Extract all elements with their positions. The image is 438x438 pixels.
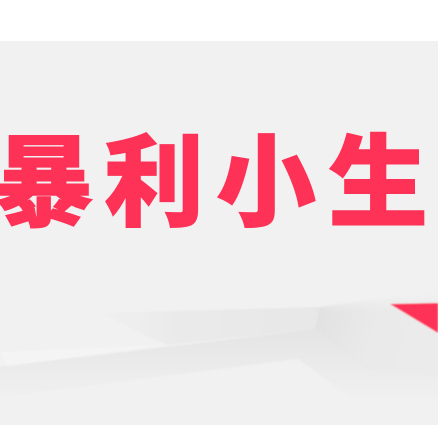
fold: inner sheet [0, 359, 350, 397]
paper fold decoration [0, 293, 438, 397]
fold: upper grey wedge [100, 307, 320, 345]
title: 暴利小生: 小 [216, 128, 316, 240]
fold: right grey sheet [315, 293, 438, 376]
fold: lower shadow band [0, 329, 438, 397]
fold: soft highlight on top of right sheet [320, 293, 438, 312]
red triangle [390, 303, 438, 333]
title: 暴利小生 [0, 128, 428, 240]
title: 暴利小生: 生 [328, 128, 428, 240]
fold: pale left sheet [0, 345, 167, 366]
title: 暴利小生: 利 [104, 128, 204, 240]
